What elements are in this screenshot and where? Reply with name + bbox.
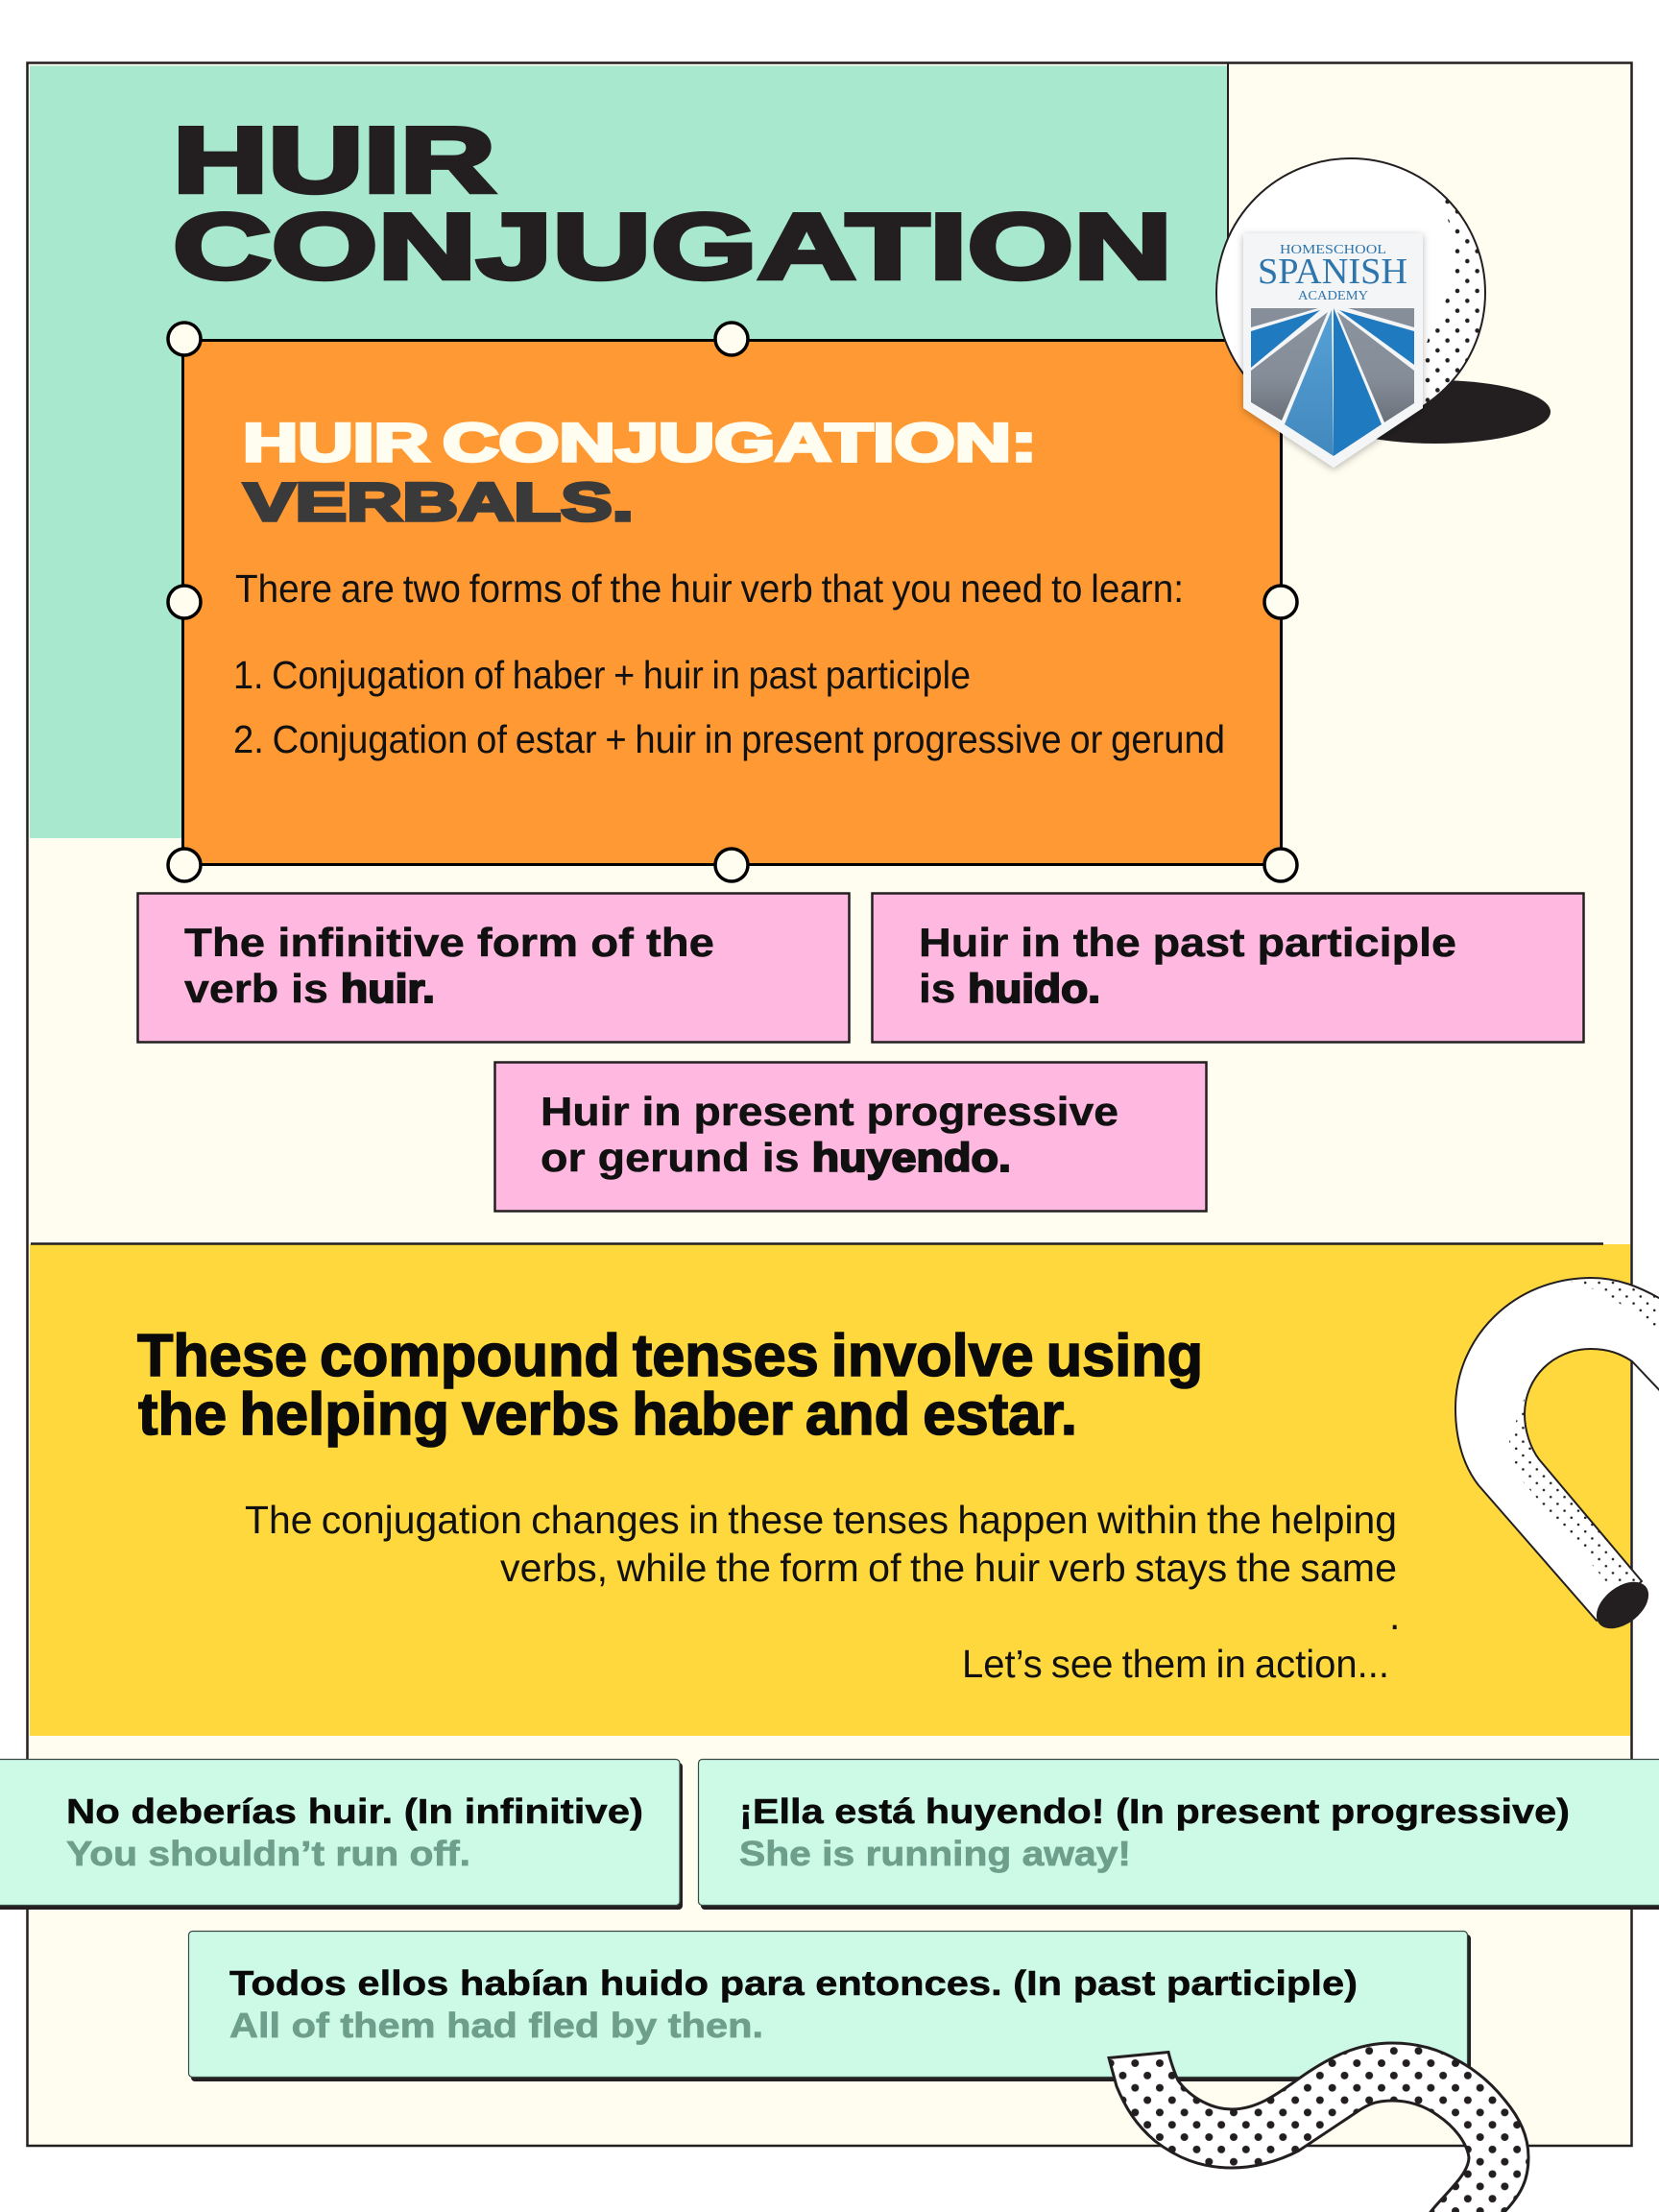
yellow body text: The conjugation changes in these tenses happen within the helping	[245, 1498, 1397, 1542]
pink box: past participle	[872, 893, 1584, 1043]
example card: infinitive: You shouldn’t run off.	[66, 1834, 470, 1873]
logo text: ACADEMY	[1298, 289, 1368, 303]
yellow body text	[245, 1498, 1400, 1686]
yellow body text: .	[1389, 1594, 1400, 1638]
yellow heading	[137, 1323, 1203, 1448]
orange panel body text	[233, 566, 1225, 761]
yellow body text: verbs, while the form of the huir verb stays the same	[500, 1546, 1397, 1590]
panel: mint title background	[30, 65, 1228, 838]
orange panel heading: HUIR	[243, 412, 429, 472]
black oval shadow	[1320, 380, 1551, 444]
orange panel heading	[243, 412, 1037, 532]
pink box: present progressive: or gerund is huyendo.	[541, 1135, 1011, 1180]
yellow body text: Let’s see them in action...	[962, 1642, 1389, 1686]
logo badge	[1216, 158, 1551, 468]
example card: past participle	[188, 1932, 1471, 2081]
orange panel body text: There are two forms of the huir verb that you need to learn:	[235, 566, 1184, 611]
pink box: past participle: Huir in the past participle	[919, 920, 1456, 965]
yellow heading: These compound tenses involve using	[137, 1323, 1203, 1389]
title: HUIR	[173, 108, 495, 212]
pink box: past participle: is huido.	[919, 966, 1100, 1011]
orange panel body text: 2. Conjugation of estar + huir in present progressive or gerund	[233, 717, 1225, 761]
white circle	[1216, 158, 1485, 427]
example card: present progressive	[699, 1759, 1659, 1910]
panel: yellow compound tenses	[30, 1244, 1630, 1736]
panel: orange verbals	[168, 323, 1297, 881]
pink box: present progressive	[495, 1062, 1206, 1212]
orange panel heading: VERBALS.	[244, 471, 634, 532]
example card: present progressive: She is running away!	[739, 1834, 1131, 1873]
logo text: SPANISH	[1258, 252, 1407, 292]
example card: past participle: All of them had fled by then.	[229, 2006, 763, 2045]
decorative squiggle	[1109, 2043, 1528, 2212]
orange panel body text: 1. Conjugation of haber + huir in past participle	[233, 653, 971, 697]
title	[173, 108, 1172, 299]
halftone	[1425, 192, 1480, 402]
pink box: infinitive: The infinitive form of the	[184, 920, 714, 965]
shield	[1243, 233, 1423, 468]
orange panel heading: CONJUGATION:	[443, 412, 1037, 472]
yellow heading: the helping verbs haber and estar.	[138, 1382, 1077, 1448]
decorative tube	[1455, 1277, 1659, 1638]
logo text: HOMESCHOOL	[1280, 243, 1386, 257]
example card: infinitive	[0, 1759, 683, 1910]
logo text	[1258, 243, 1407, 303]
selection handles	[168, 323, 1297, 881]
pink box: infinitive	[138, 893, 849, 1043]
example card: infinitive: No deberías huir. (In infinitive)	[66, 1791, 643, 1831]
example card: past participle: Todos ellos habían huido para entonces. (In past participle)	[229, 1963, 1358, 2003]
tube end cap	[1588, 1573, 1657, 1638]
mint panel right edge	[1227, 63, 1229, 346]
title: CONJUGATION	[173, 194, 1172, 299]
pink box: infinitive: verb is huir.	[184, 966, 435, 1011]
example card: present progressive: ¡Ella está huyendo! (In present progressive)	[739, 1791, 1570, 1831]
pink box: present progressive: Huir in present progressive	[541, 1089, 1118, 1134]
tube halftone	[1509, 1277, 1659, 1584]
